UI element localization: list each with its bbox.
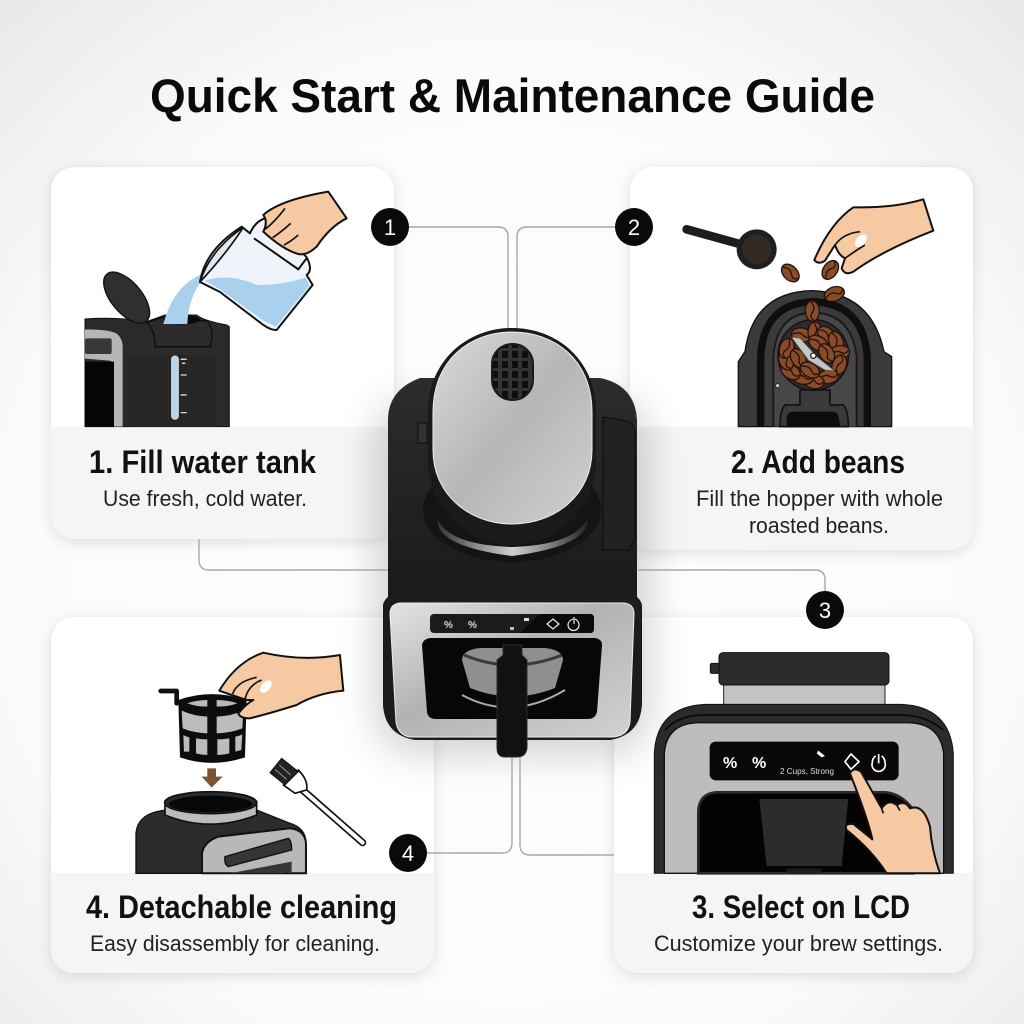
panel: step 1 fill water tank	[51, 167, 394, 539]
description: Use fresh, cold water.	[103, 486, 307, 511]
lid vent	[492, 344, 533, 400]
illustration: touching display	[654, 653, 953, 873]
display readout: 2 Cups, Strong	[780, 766, 834, 776]
machine shadow	[375, 400, 650, 755]
control display: %	[468, 620, 477, 631]
display percent icon: %	[723, 755, 737, 772]
illustration: pouring water	[85, 192, 347, 427]
description: Easy disassembly for cleaning.	[90, 931, 380, 956]
description: Customize your brew settings.	[654, 931, 943, 956]
brushed steel lid	[433, 332, 592, 524]
central coffee machine	[383, 328, 642, 757]
connector lines	[199, 227, 825, 855]
badge 1	[371, 208, 409, 246]
control display: %	[444, 620, 453, 631]
machine lower housing	[383, 592, 642, 740]
heading: 1. Fill water tank	[89, 444, 316, 480]
lid base and ring	[423, 328, 601, 562]
heading: 4. Detachable cleaning	[86, 889, 397, 925]
badge 1: 1	[384, 215, 396, 240]
panel: step 3 select on LCD	[614, 617, 973, 973]
badge 3	[806, 591, 844, 629]
silver front panel	[390, 603, 634, 737]
heading: 2. Add beans	[731, 444, 905, 480]
heading: 3. Select on LCD	[692, 889, 910, 925]
water door and side slot	[603, 417, 635, 550]
illustration: beans and hopper	[687, 199, 933, 427]
control display	[430, 614, 594, 633]
carafe handle	[497, 645, 527, 757]
badge 4	[389, 834, 427, 872]
machine upper body	[388, 378, 637, 600]
brew window with carafe	[422, 638, 602, 719]
badge 2: 2	[628, 215, 640, 240]
illustration: filter basket and brush	[136, 653, 363, 873]
badge 4: 4	[402, 841, 414, 866]
panel: step 2 add beans	[630, 167, 973, 550]
description: Fill the hopper with whole	[696, 486, 943, 511]
panel: step 4 detachable cleaning	[51, 617, 434, 973]
display percent icon: %	[752, 755, 766, 772]
badge 3: 3	[819, 598, 831, 623]
title: Quick Start & Maintenance Guide	[150, 69, 875, 122]
description line 2: roasted beans.	[749, 513, 889, 538]
badge 2	[615, 208, 653, 246]
